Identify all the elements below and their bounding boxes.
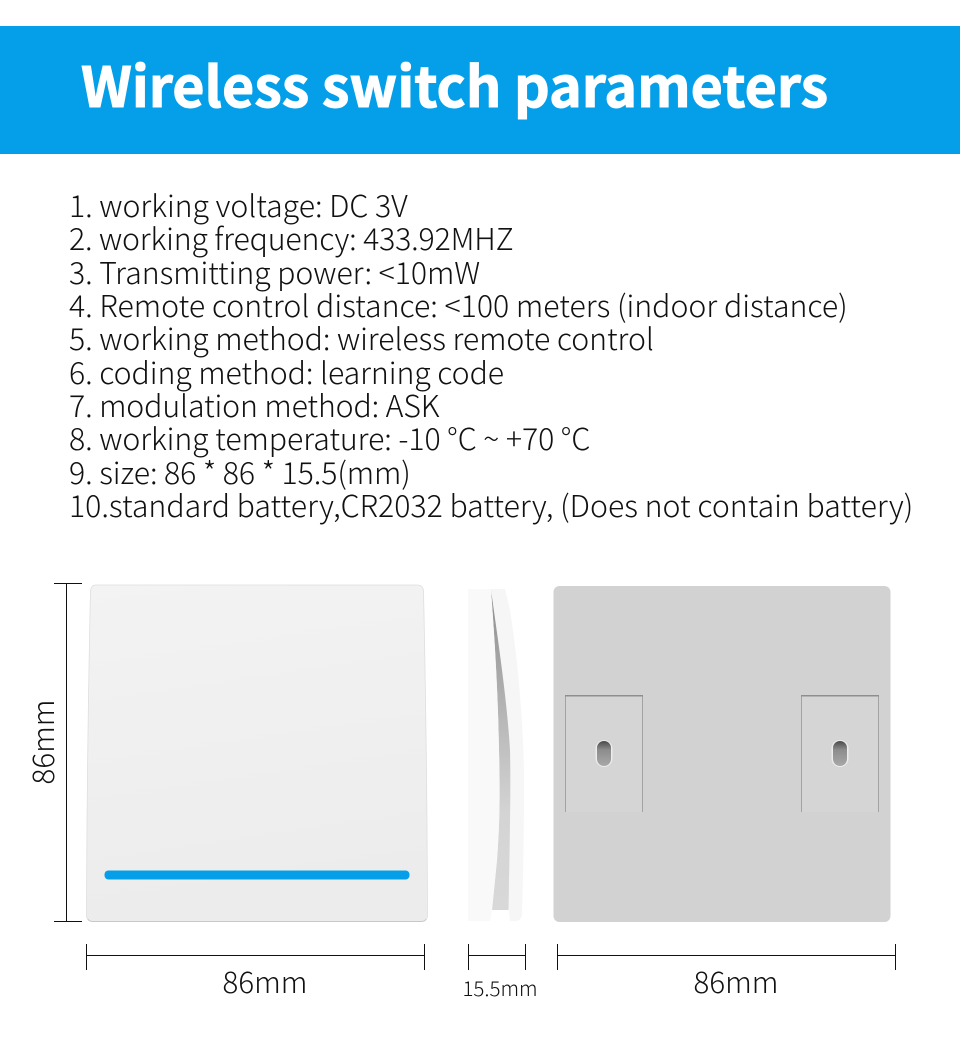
- width dimension line front: [86, 944, 424, 970]
- parameter list: 5. working method: wireless remote control: [69, 315, 654, 359]
- title: Wireless switch parameters: [81, 42, 828, 122]
- parameter list: [69, 182, 913, 526]
- thickness label: 15.5mm: [462, 972, 538, 1002]
- parameter list: 7. modulation method: ASK: [69, 382, 439, 426]
- parameter list: 3. Transmitting power: <10mW: [69, 249, 480, 293]
- parameter list: 1. working voltage: DC 3V: [69, 182, 408, 226]
- parameter list: 10.standard battery,CR2032 battery, (Does not contain battery): [69, 482, 913, 526]
- left mounting recess: [565, 695, 643, 812]
- parameter list: 9. size: 86 * 86 * 15.5(mm): [69, 449, 411, 493]
- width label front: 86mm: [223, 960, 307, 1002]
- width label back: 86mm: [694, 960, 778, 1002]
- right mounting recess: [801, 695, 879, 812]
- parameter list: 6. coding method: learning code: [69, 349, 504, 393]
- thickness dimension line: [468, 944, 526, 970]
- height label: 86mm: [21, 700, 63, 784]
- width dimension line back: [558, 944, 896, 970]
- title banner: [0, 26, 960, 154]
- parameter list: 4. Remote control distance: <100 meters (indoor distance): [69, 282, 848, 326]
- back view of switch: [554, 586, 890, 922]
- height dimension line: [54, 584, 82, 922]
- blue indicator bar: [104, 870, 410, 880]
- parameter list: 2. working frequency: 433.92MHZ: [69, 215, 513, 259]
- front view of switch: [86, 585, 428, 922]
- side view of switch: [468, 589, 524, 921]
- parameter list: 8. working temperature: -10 °C ~ +70 °C: [69, 415, 590, 459]
